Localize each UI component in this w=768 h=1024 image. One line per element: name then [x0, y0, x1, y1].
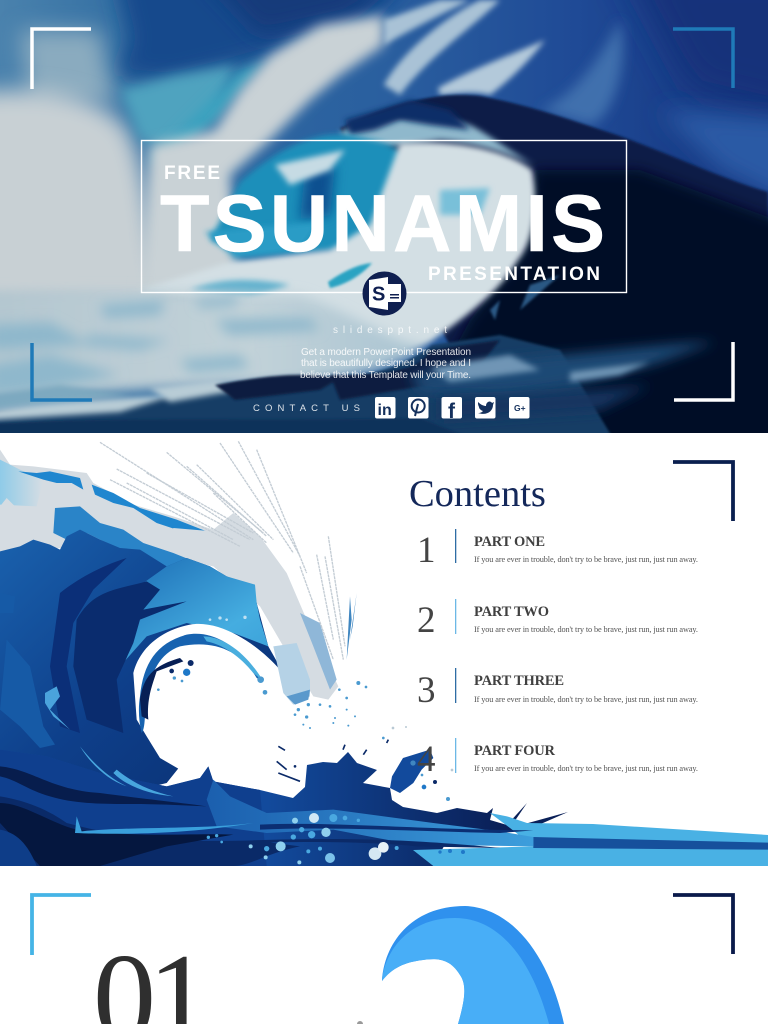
droplets: [157, 616, 453, 801]
label: PRESENTATION: PRESENTATION: [428, 264, 600, 285]
spray lines: [100, 441, 345, 660]
item: part three: If you are ever in trouble, don't try to be brave, just run, just run away.: [474, 695, 698, 704]
text block: description: Get a modern PowerPoint Presentation: [301, 347, 471, 358]
label: contact us: CONTACT US: [253, 403, 360, 414]
icon: pinterest: [408, 397, 428, 418]
icon: google plus: G+: [514, 403, 526, 413]
label: FREE: FREE: [164, 163, 220, 184]
item: part two: [417, 599, 698, 641]
bracket: section top left: [32, 895, 91, 955]
item: part three: 3: [417, 670, 436, 711]
text block: description: believe that this Template will your Time.: [300, 370, 471, 381]
bracket: contents top right: [673, 462, 733, 521]
bracket: bottom right: [674, 342, 733, 400]
slide 1: cover: [0, 0, 768, 450]
item: part three: PART THREE: [474, 673, 564, 689]
photo: breaking wave: [0, 0, 768, 450]
item: part one: [417, 529, 698, 571]
title: TSUNAMIS: TSUNAMIS: [160, 179, 605, 269]
icon: facebook: [442, 397, 462, 423]
icon: wave shape: [357, 906, 564, 1024]
heading: Contents: Contents: [409, 473, 546, 515]
item: part one: 1: [417, 530, 436, 571]
crest edge: [18, 471, 207, 531]
slide 2: contents: [0, 441, 768, 866]
bubbles: [207, 813, 465, 864]
bracket: section top right: [673, 895, 733, 954]
foam blob: [273, 643, 310, 705]
icon: presentation logo: S: [372, 284, 385, 306]
bracket: top right: [673, 29, 733, 88]
item: part four: PART FOUR: [474, 743, 556, 759]
bracket: bottom left: [32, 343, 92, 400]
bracket: top left: [32, 29, 91, 89]
section number: [93, 929, 211, 1024]
icon: linkedin: in: [378, 402, 392, 419]
title frame: [142, 140, 626, 292]
crest foam: [0, 450, 338, 700]
item: part four: [417, 738, 698, 780]
item: part two: If you are ever in trouble, don't try to be brave, just run, just run away.: [474, 625, 698, 634]
light band: [413, 813, 768, 866]
splash marks: [277, 740, 388, 781]
text block: description: [300, 347, 471, 381]
curl white hole: [133, 624, 280, 768]
sea and splash: [159, 752, 568, 866]
item: part four: 4: [417, 739, 436, 780]
item: part four: If you are ever in trouble, don't try to be brave, just run, just run away.: [474, 764, 698, 773]
icon: facebook: f: [448, 400, 456, 423]
brand: slidesppt.net: slidesppt.net: [333, 325, 447, 336]
item: part one: If you are ever in trouble, don't try to be brave, just run, just run away.: [474, 555, 698, 564]
illustration: blue wave: [0, 441, 768, 866]
icon: twitter: [475, 397, 496, 418]
inner curl lip: [139, 634, 263, 733]
icon: linkedin: [375, 397, 396, 419]
item: part two: 2: [417, 600, 436, 641]
item: part one: PART ONE: [474, 534, 545, 550]
text block: description: that is beautifully designed. I hope and I: [301, 358, 471, 369]
wave body: [0, 530, 283, 800]
slide 3: section 01: [32, 895, 733, 1024]
icon: presentation logo: [362, 272, 406, 316]
item: part two: PART TWO: [474, 604, 549, 620]
icon: google plus: [509, 397, 530, 418]
item: part three: [417, 668, 698, 711]
